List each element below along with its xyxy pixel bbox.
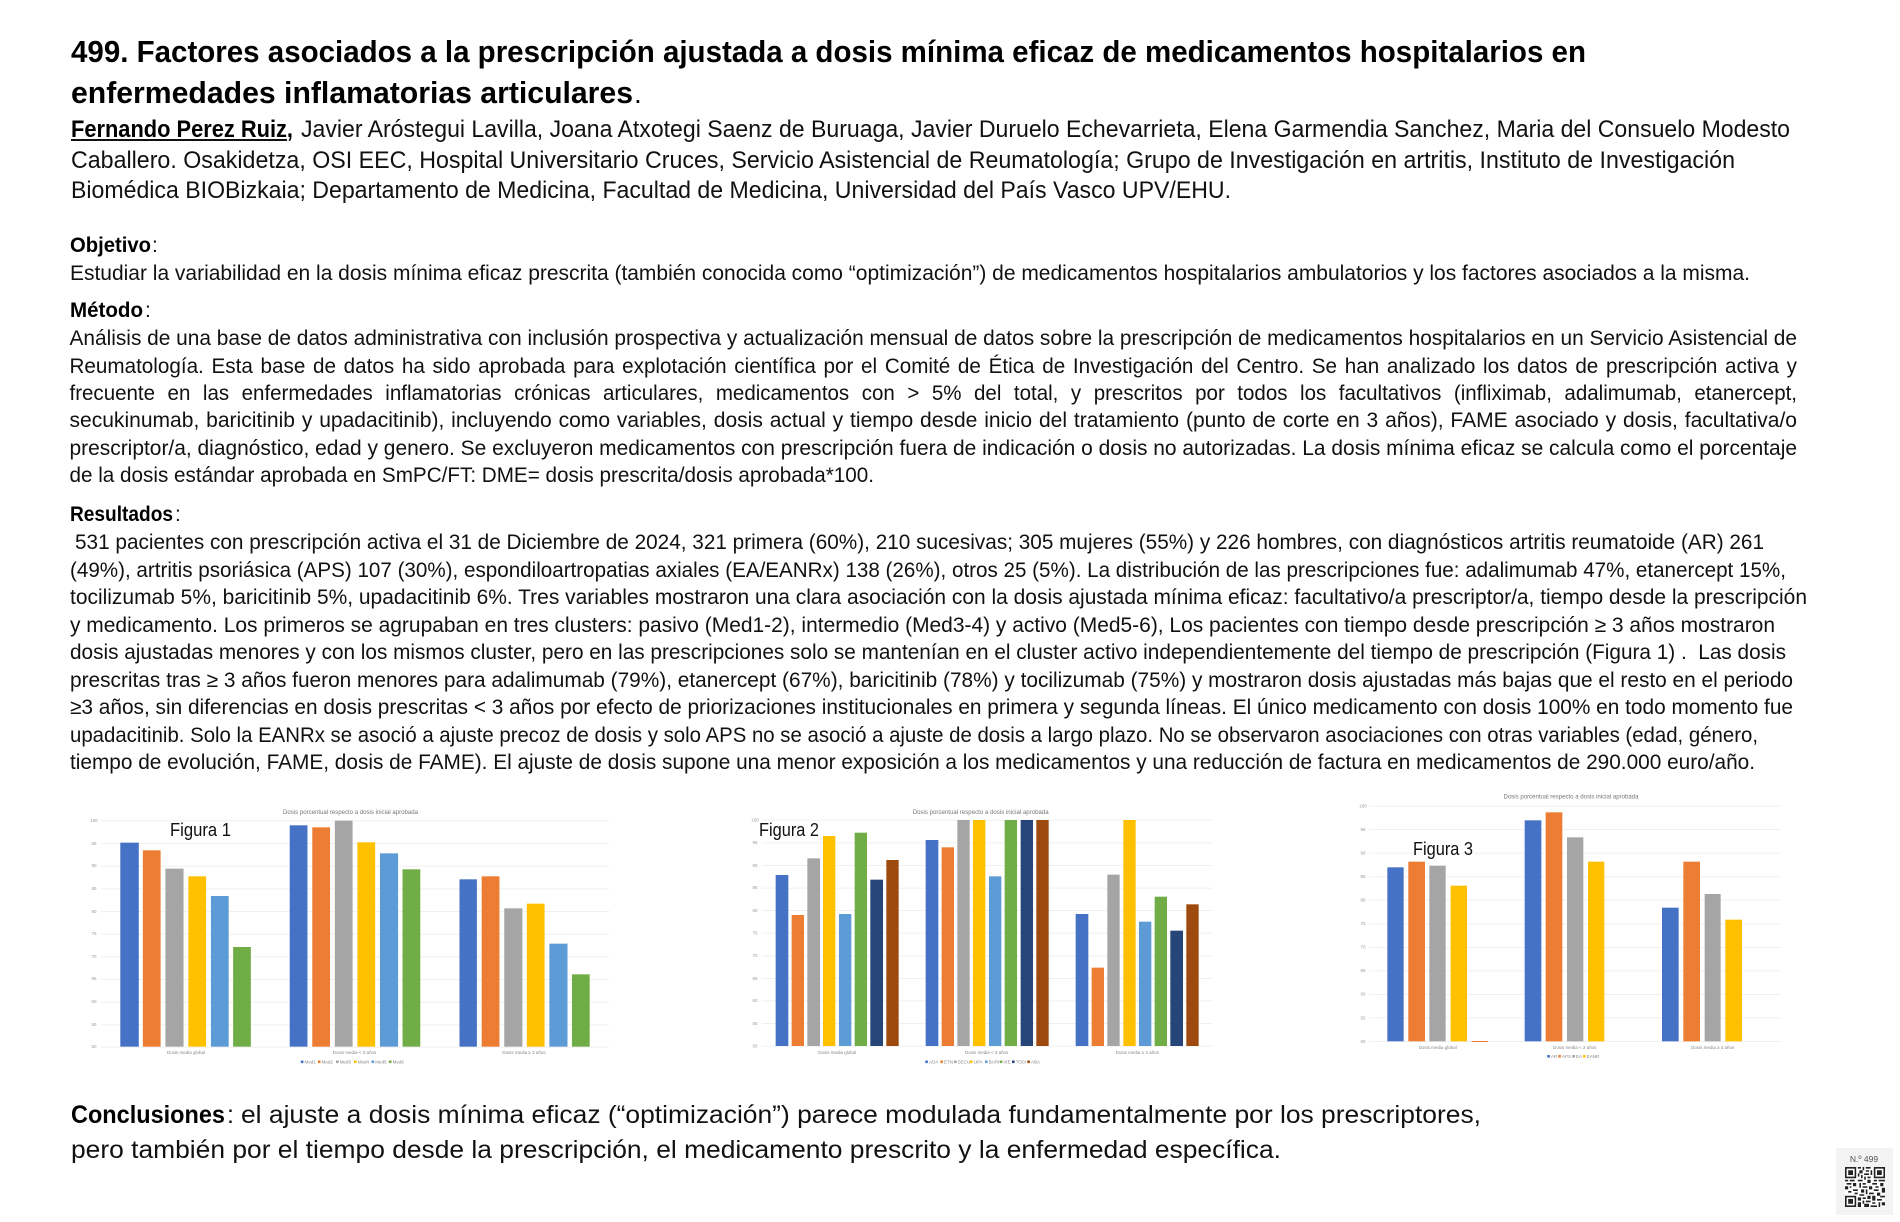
conclusions [71,1101,1481,1164]
chart: figura 3: 60 [1360,992,1366,997]
chart: figura 1: Med3 [340,1060,351,1064]
section: método [70,299,1797,487]
conclusions: pero también por el tiempo desde la prescripción, el medicamento prescrito y la enfermedad específica. [71,1136,1281,1164]
chart: figura 2: TOCI [1016,1060,1026,1064]
chart: figura 1: Dosis media < 3 años [333,1050,377,1055]
chart: figura 3: 85 [1360,874,1366,879]
section: método: Análisis de una base de datos administrativa con inclusión prospectiva y actualización mensual de datos sobre la prescripción de medicamentos hospitalarios en un Servicio Asistencial de [70,327,1797,350]
section: objetivo [70,234,1750,285]
chart: figura 3: 65 [1360,968,1366,973]
section: objetivo: Estudiar la variabilidad en la dosis mínima eficaz prescrita (también conocida como “optimización”) de medicamentos hospitalarios ambulatorios y los factores asociados a la misma. [70,262,1750,285]
chart: figura 1: 65 [91,976,97,981]
chart: figura 2: UPA [974,1060,983,1064]
chart: figura 2: 75 [752,930,758,936]
icon: qr code [1845,1167,1885,1207]
chart: figura 3: 100 [1359,804,1367,808]
chart: figura 1: 50 [91,1044,97,1049]
title: 499. Factores asociados a la prescripción ajustada a dosis mínima eficaz de medicamentos hospitalarios en [71,35,1586,69]
chart: figura 3: 90 [1360,851,1366,856]
chart: figura 2: Dosis media < 3 años [965,1050,1009,1055]
qr badge [1836,1148,1893,1215]
chart: figura 2: Dosis porcentual respecto a dosis inicial aprobada [913,809,1049,816]
title [71,35,1586,110]
chart: figura 3: Dosis media < 3 años [1553,1045,1597,1050]
chart: figura 1: 80 [91,909,97,914]
section: método: Método [70,299,143,322]
chart: figura 3: AR [1551,1054,1558,1059]
authors and affiliations: Caballero. Osakidetza, OSI EEC, Hospital Universitario Cruces, Servicio Asistencial de Reumatología; Grupo de Investigación en artritis, Instituto de Investigación [71,147,1735,174]
conclusions: Conclusiones [71,1101,225,1129]
conclusions: el ajuste a dosis mínima eficaz (“optimización”) parece modulada fundamentalmente por los prescriptores, [241,1101,1481,1129]
chart: figura 2: 65 [752,976,758,981]
chart: figura 3: EA [1576,1054,1582,1059]
section: resultados: ≥3 años, sin diferencias en dosis prescritas < 3 años por efecto de priorizaciones institucionales en primera y segunda líneas. El único medicamento con dosis 100% en todo momento fue [70,696,1793,719]
chart: figura 1: Dosis media ≥ 3 años [502,1050,546,1055]
chart: figura 2: 50 [752,1044,758,1048]
section: método: prescriptor/a, diagnóstico, edad y genero. Se excluyeron medicamentos con prescripción fuera de indicación o dosis no autorizadas. La dosis mínima eficaz se calcula como el porcentaje [70,437,1797,460]
chart: figura 3: 95 [1360,827,1366,832]
chart: figura 1: 55 [91,1022,97,1027]
chart: figura 3 [1359,794,1781,1059]
title: enfermedades inflamatorias articulares [71,76,633,110]
chart: figura 3: APS [1562,1054,1571,1059]
section: resultados [70,503,1807,774]
chart: figura 2: ADA [929,1060,938,1064]
section: método: de la dosis estándar aprobada en SmPC/FT: DME= dosis prescrita/dosis aprobada*100. [70,464,874,487]
section: resultados: prescritas tras ≥ 3 años fueron menores para adalimumab (79%), etanercept (67%), baricitinib (78%) y tocilizumab (75%) y mostraron dosis ajustadas más bajas que el resto en el periodo [70,669,1793,692]
chart: figura 2: ABA [1031,1060,1040,1064]
authors and affiliations: Javier Aróstegui Lavilla, Joana Atxotegi Saenz de Buruaga, Javier Duruelo Echevarrieta, Elena Garmendia Sanchez, Maria del Consuelo Modesto [301,116,1790,143]
chart: figura 2: 85 [752,885,758,890]
chart: figura 1: 85 [91,886,97,891]
chart: figura 2: 55 [752,1021,758,1026]
chart: figura 1: 90 [91,863,97,868]
chart: figura 2: 80 [752,908,758,913]
chart: figura 1: Dosis media global [167,1050,205,1055]
chart: figura 1: 75 [91,931,97,936]
chart: figura 1: 60 [91,999,97,1004]
chart: figura 3: 55 [1360,1015,1366,1020]
chart: figura 2: SECU [958,1060,970,1064]
authors and affiliations: Fernando Perez Ruiz, [71,116,293,143]
chart: figura 3: Dosis media global [1419,1045,1457,1050]
title: . [634,78,642,109]
chart: figura 2: 90 [752,863,758,868]
authors and affiliations [71,116,1790,204]
chart: figura 3: Dosis media ≥ 3 años [1691,1045,1735,1050]
chart: figura 1: 70 [91,954,97,959]
chart: figura 2 [751,809,1212,1064]
chart: figura 1: Med5 [375,1060,387,1064]
authors and affiliations: Biomédica BIOBizkaia; Departamento de Medicina, Facultad de Medicina, Universidad del País Vasco UPV/EHU. [71,177,1231,204]
section: resultados: upadacitinib. Solo la EANRx se asoció a ajuste precoz de dosis y solo APS no se asoció a ajuste de dosis a largo plazo. No se observaron asociaciones con otras variables (edad, género, [70,724,1758,747]
chart: figura 1: 100 [90,818,98,823]
chart: figura 1: Med6 [393,1060,404,1064]
section: objetivo: : [152,234,158,257]
conclusions: : [227,1101,234,1129]
chart: figura 3: Dosis porcentual respecto a dosis inicial aprobada [1504,794,1639,801]
section: resultados: dosis ajustadas menores y con los mismos cluster, pero en las prescripciones solo se mantenían en el cluster activo independientemente del tiempo de prescripción (Figura 1) . Las dosis [70,641,1786,664]
chart: figura 1: 95 [91,841,97,846]
chart: figura 2: 100 [751,818,759,822]
chart: figura 2: ETN [944,1060,953,1064]
chart: figura 2: IXE [1003,1060,1011,1064]
chart: figura 1: Med1 [304,1060,316,1064]
chart: figura 3: 70 [1360,945,1366,950]
section: método: frecuente en las enfermedades inflamatorias crónicas articulares, medicamentos con > 5% del total, y prescritos por todos los facultativos (infliximab, adalimumab, etanercept, [70,382,1797,405]
chart: figura 3: EANR [1587,1054,1600,1059]
chart: figura 2: Dosis media global [818,1050,856,1055]
chart: figura 2: BARI [989,1060,999,1064]
label: figura 1: Figura 1 [170,819,231,840]
section: método: : [145,299,151,322]
chart: figura 2: 95 [752,840,758,845]
chart: figura 3: 50 [1360,1039,1366,1044]
chart: figura 1: Med4 [358,1060,370,1064]
section: resultados: y medicamento. Los primeros se agrupaban en tres clusters: pasivo (Med1-2), intermedio (Med3-4) y activo (Med5-6), Los pacientes con tiempo desde prescripción ≥ 3 años mostraron [70,614,1775,637]
section: objetivo: Objetivo [70,234,151,257]
section: resultados: 531 pacientes con prescripción activa el 31 de Diciembre de 2024, 321 primera (60%), 210 sucesivas; 305 mujeres (55%) y 226 hombres, con diagnósticos artritis reumatoide (AR) 261 [75,531,1764,554]
chart: figura 3: 80 [1360,898,1366,903]
label: figura 2: Figura 2 [759,819,819,840]
section: resultados: Resultados [70,503,173,526]
chart: figura 2: 70 [752,953,758,958]
chart: figura 1: Dosis porcentual respecto a dosis inicial aprobada [283,809,418,816]
section: método: Reumatología. Esta base de datos ha sido aprobada para explotación científica por el Comité de Ética de Investigación del Centro. Se han analizado los datos de prescripción activa y [70,355,1797,378]
qr badge: N.º 499 [1850,1154,1878,1164]
section: resultados: : [175,503,181,526]
chart: figura 1: Med2 [322,1060,333,1064]
chart: figura 1 [90,809,609,1064]
chart: figura 3: 75 [1360,921,1366,926]
chart: figura 2: Dosis media ≥ 3 años [1116,1050,1160,1055]
section: resultados: (49%), artritis psoriásica (APS) 107 (30%), espondiloartropatias axiales (EA/EANRx) 138 (26%), otros 25 (5%). La distribución de las prescripciones fue: adalimumab 47%, etanercept 15%, [70,559,1786,582]
section: método: secukinumab, baricitinib y upadacitinib), incluyendo como variables, dosis actual y tiempo desde inicio del tratamiento (punto de corte en 3 años), FAME asociado y dosis, facultativa/o [70,409,1797,432]
chart: figura 2: 60 [752,998,758,1003]
label: figura 3: Figura 3 [1413,838,1473,859]
section: resultados: tiempo de evolución, FAME, dosis de FAME). El ajuste de dosis supone una menor exposición a los medicamentos y una reducción de factura en medicamentos de 290.000 euro/año. [70,751,1755,774]
section: resultados: tocilizumab 5%, baricitinib 5%, upadacitinib 6%. Tres variables mostraron una clara asociación con la dosis ajustada mínima eficaz: facultativo/a prescriptor/a, tiempo desde la prescripción [70,586,1807,609]
